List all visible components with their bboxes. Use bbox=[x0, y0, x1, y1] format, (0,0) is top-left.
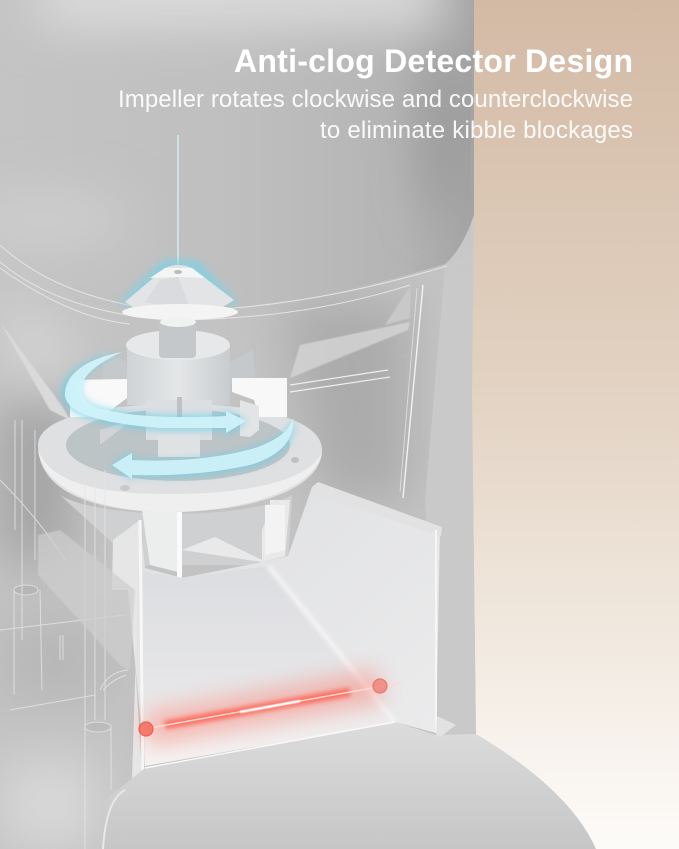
feeder body bbox=[0, 0, 480, 849]
neck below flange bbox=[60, 495, 292, 578]
subtitle: to eliminate kibble blockages bbox=[320, 117, 633, 144]
transparent posts and left wire lines bbox=[0, 420, 128, 849]
right sensor dot bbox=[373, 679, 387, 693]
hopper bowl bbox=[0, 0, 474, 311]
bowl rim lines bbox=[0, 245, 447, 324]
left sensor dot bbox=[139, 722, 153, 736]
subtitle: Impeller rotates clockwise and counterclockwise bbox=[118, 86, 633, 113]
funnel highlight edges bbox=[0, 285, 423, 498]
bowl soft highlights bbox=[34, 0, 460, 230]
title: Anti-clog Detector Design bbox=[234, 43, 633, 79]
red sensor beam bbox=[139, 679, 400, 736]
subtitle bbox=[118, 86, 633, 144]
impeller blades bbox=[70, 350, 287, 445]
right body band bbox=[425, 215, 476, 740]
flange plate bbox=[38, 404, 322, 512]
body soft shading bbox=[0, 280, 410, 849]
blue rotation arrows bbox=[62, 352, 294, 480]
vertical light beam bbox=[177, 135, 179, 270]
impeller cone bbox=[118, 260, 240, 320]
tray base bbox=[103, 716, 596, 849]
chute panel bbox=[112, 482, 442, 788]
left box edge bbox=[38, 530, 135, 670]
hub cylinder bbox=[126, 317, 230, 457]
